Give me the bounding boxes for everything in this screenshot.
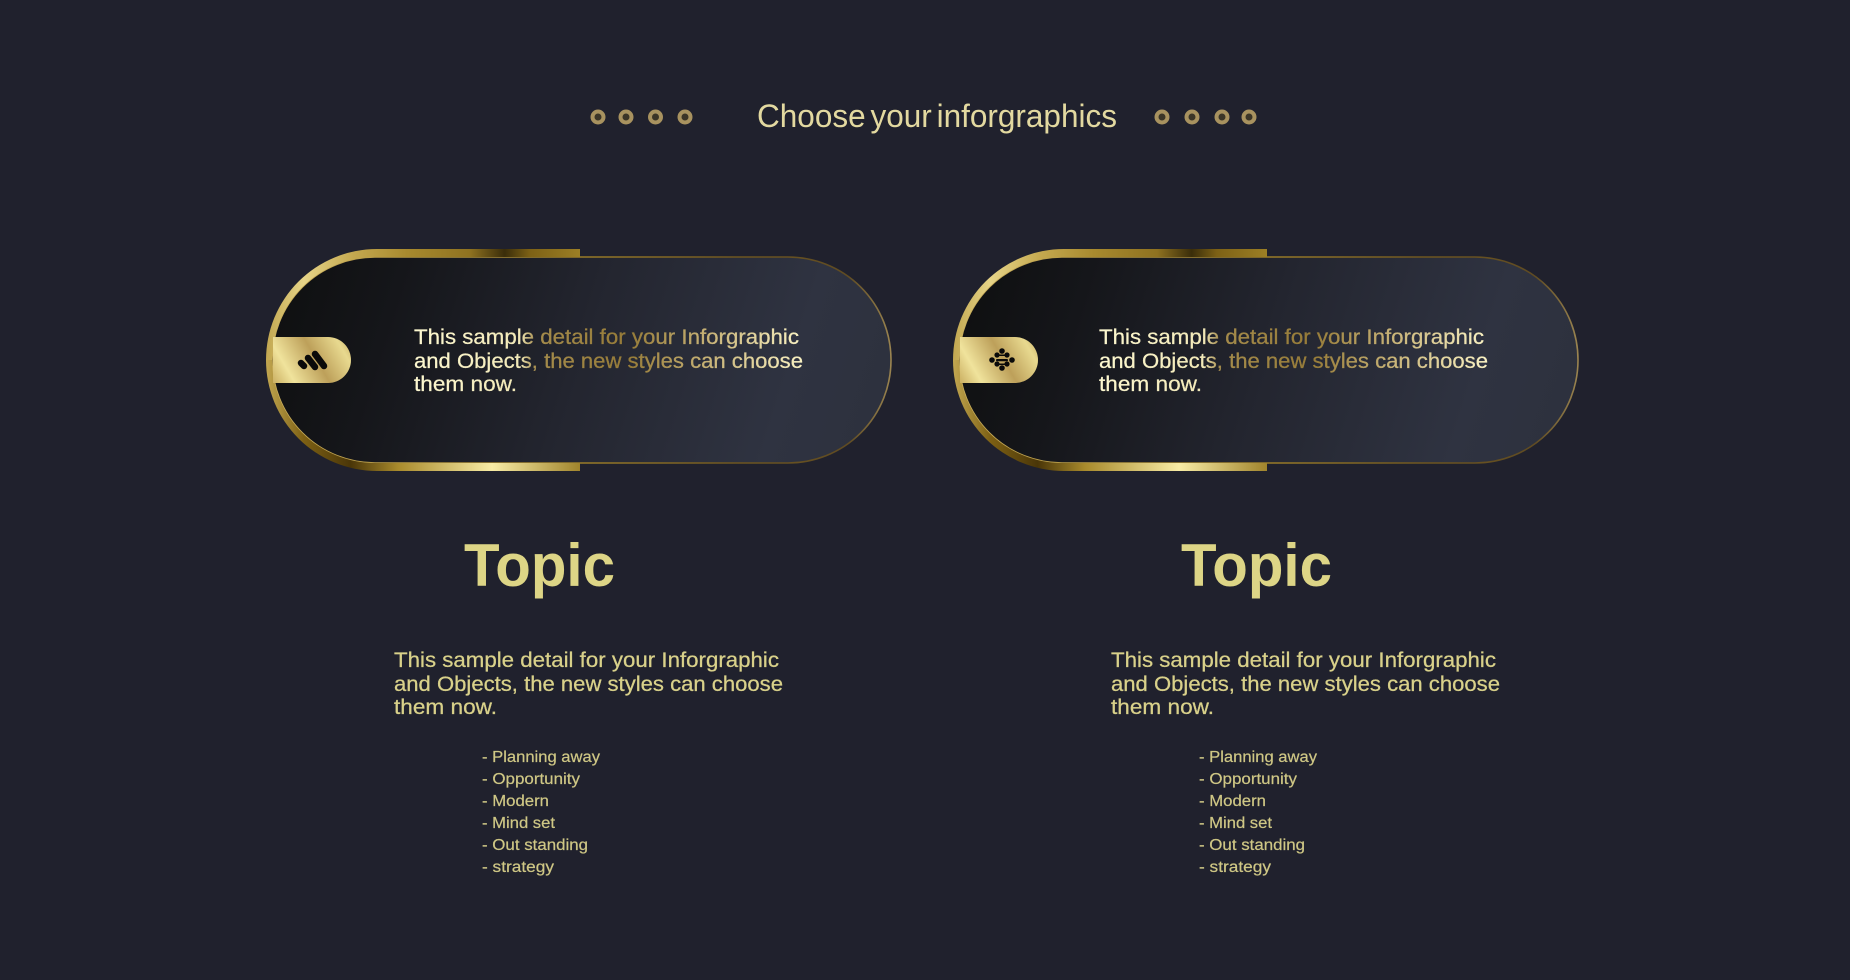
- pill text: them now.: [414, 373, 517, 396]
- bullet list: - Out standing: [482, 837, 588, 854]
- left header dots: [592, 112, 690, 122]
- gold lower accent: [266, 360, 580, 471]
- gold upper accent: [266, 249, 580, 360]
- title: Choose your inforgraphics: [757, 98, 1117, 134]
- bullet list: [482, 749, 600, 876]
- bullet list: - Opportunity: [482, 771, 580, 788]
- bullet list: - Opportunity: [1199, 771, 1297, 788]
- tab: [273, 337, 351, 383]
- description: them now.: [1111, 696, 1214, 719]
- heading: topic: Topic: [464, 532, 615, 599]
- right column text: [1111, 532, 1500, 876]
- pill text: and Objects, the new styles can choose: [1099, 350, 1488, 373]
- description: and Objects, the new styles can choose: [1111, 673, 1500, 696]
- bullet list: - Mind set: [1199, 815, 1273, 832]
- header: [592, 98, 1254, 134]
- bullet list: - Mind set: [482, 815, 556, 832]
- bullet list: - strategy: [1199, 859, 1271, 876]
- pill text: [414, 326, 803, 396]
- bullet list: - strategy: [482, 859, 554, 876]
- bullet list: - Modern: [1199, 793, 1266, 810]
- pill text: [1099, 326, 1488, 396]
- pill text: and Objects, the new styles can choose: [414, 350, 803, 373]
- icon: slanted bars: [301, 354, 324, 367]
- left column text: [394, 532, 783, 876]
- pill body: [959, 257, 1578, 463]
- panel: right pill: [953, 249, 1578, 471]
- bullet list: - Planning away: [482, 749, 600, 766]
- description: This sample detail for your Inforgraphic: [394, 649, 779, 672]
- description: and Objects, the new styles can choose: [394, 673, 783, 696]
- gold lower accent: [953, 360, 1267, 471]
- panel: left pill: [266, 249, 891, 471]
- bullet list: - Planning away: [1199, 749, 1317, 766]
- bullet list: - Out standing: [1199, 837, 1305, 854]
- description: [394, 649, 783, 719]
- pill text: them now.: [1099, 373, 1202, 396]
- bullet list: [1199, 749, 1317, 876]
- icon: dot diamond: [989, 348, 1015, 371]
- pill text: This sample detail for your Inforgraphic: [1099, 326, 1484, 349]
- tab: [960, 337, 1038, 383]
- gold upper accent: [953, 249, 1267, 360]
- bullet list: - Modern: [482, 793, 549, 810]
- right header dots: [1156, 112, 1254, 122]
- pill text: This sample detail for your Inforgraphic: [414, 326, 799, 349]
- description: them now.: [394, 696, 497, 719]
- description: [1111, 649, 1500, 719]
- description: This sample detail for your Inforgraphic: [1111, 649, 1496, 672]
- heading: topic: Topic: [1181, 532, 1332, 599]
- pill body: [272, 257, 891, 463]
